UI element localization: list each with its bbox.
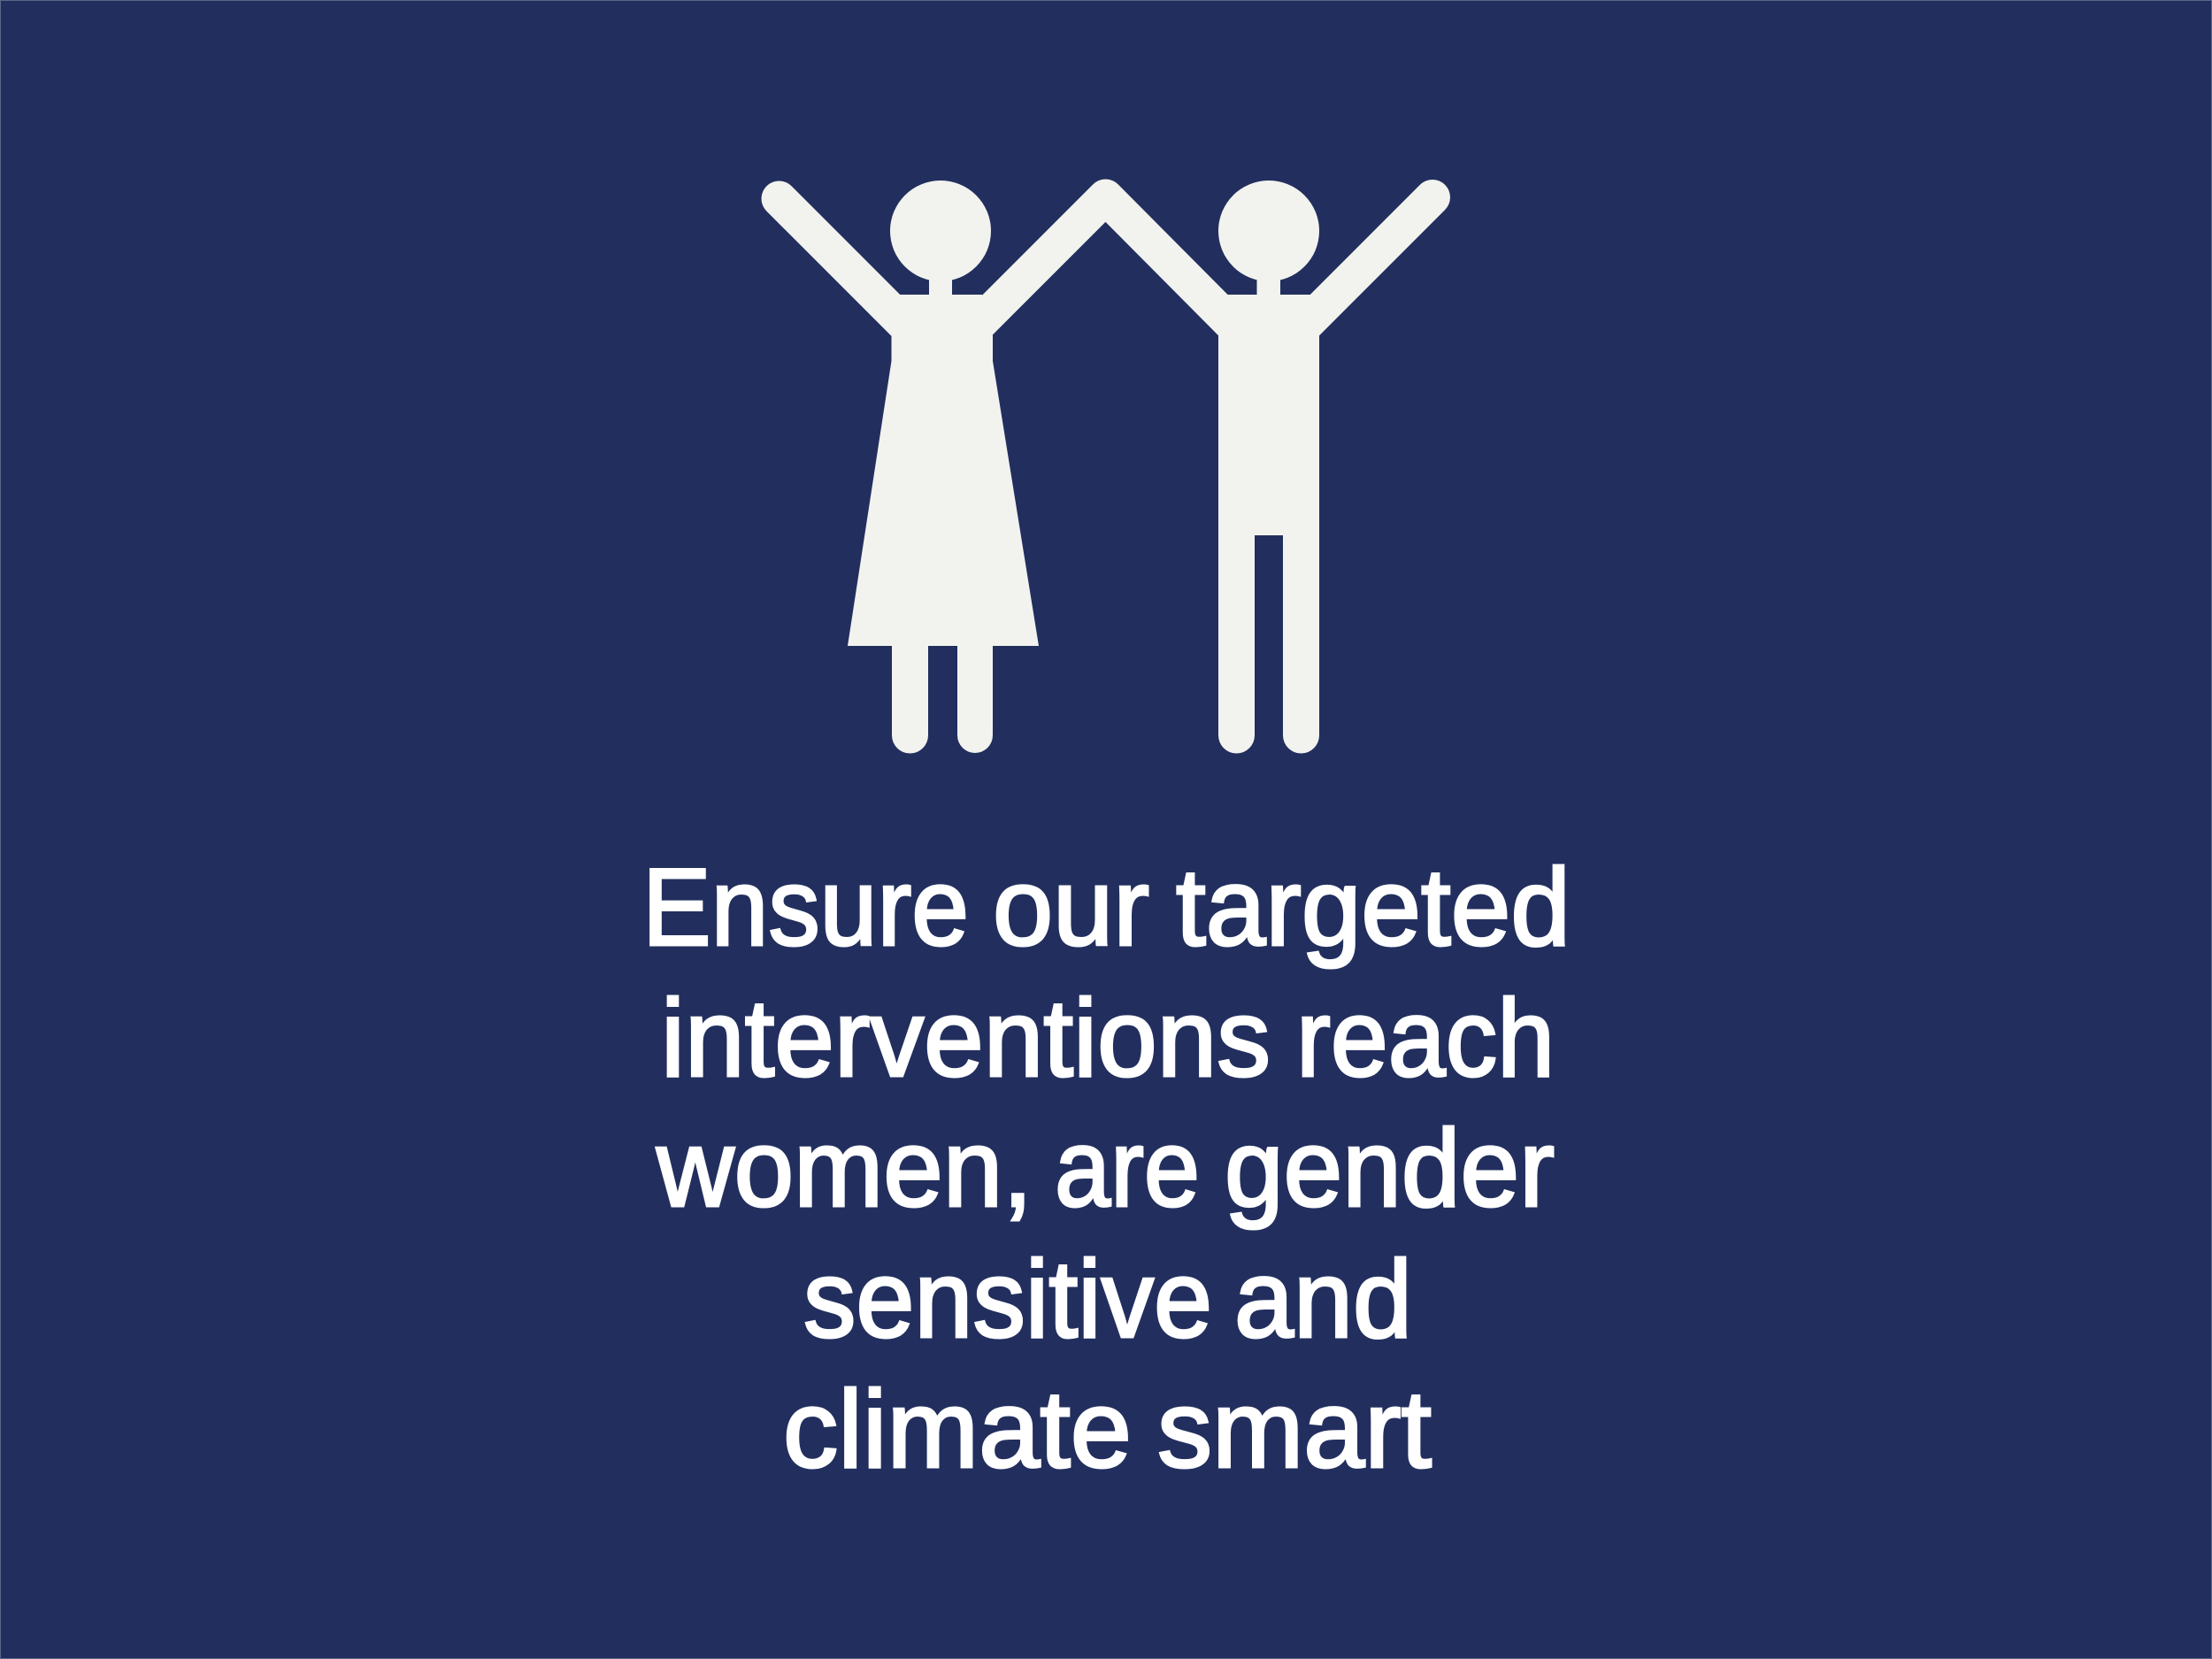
text block: main message: targeted xyxy=(1176,847,1571,969)
text block: main message: our xyxy=(993,847,1149,969)
icon: joined raised arms xyxy=(964,196,1247,339)
text block: main message: and xyxy=(1234,1239,1412,1361)
icon: man figure xyxy=(1218,180,1432,754)
text block: main message: sensitive xyxy=(803,1239,1212,1361)
text block: main message: interventions xyxy=(661,978,1271,1100)
text block: main message xyxy=(642,847,1571,1491)
text block: main message: Ensure xyxy=(642,847,969,969)
text block: main message: climate xyxy=(783,1369,1132,1491)
text block: main message: women, xyxy=(656,1108,1033,1230)
text block: main message: reach xyxy=(1296,978,1555,1100)
icon: woman and man holding raised hands xyxy=(779,180,1432,754)
text block: main message: gender xyxy=(1225,1108,1555,1230)
icon: woman figure xyxy=(779,180,1039,754)
text block: main message: smart xyxy=(1157,1369,1432,1491)
text block: main message: are xyxy=(1055,1108,1200,1230)
